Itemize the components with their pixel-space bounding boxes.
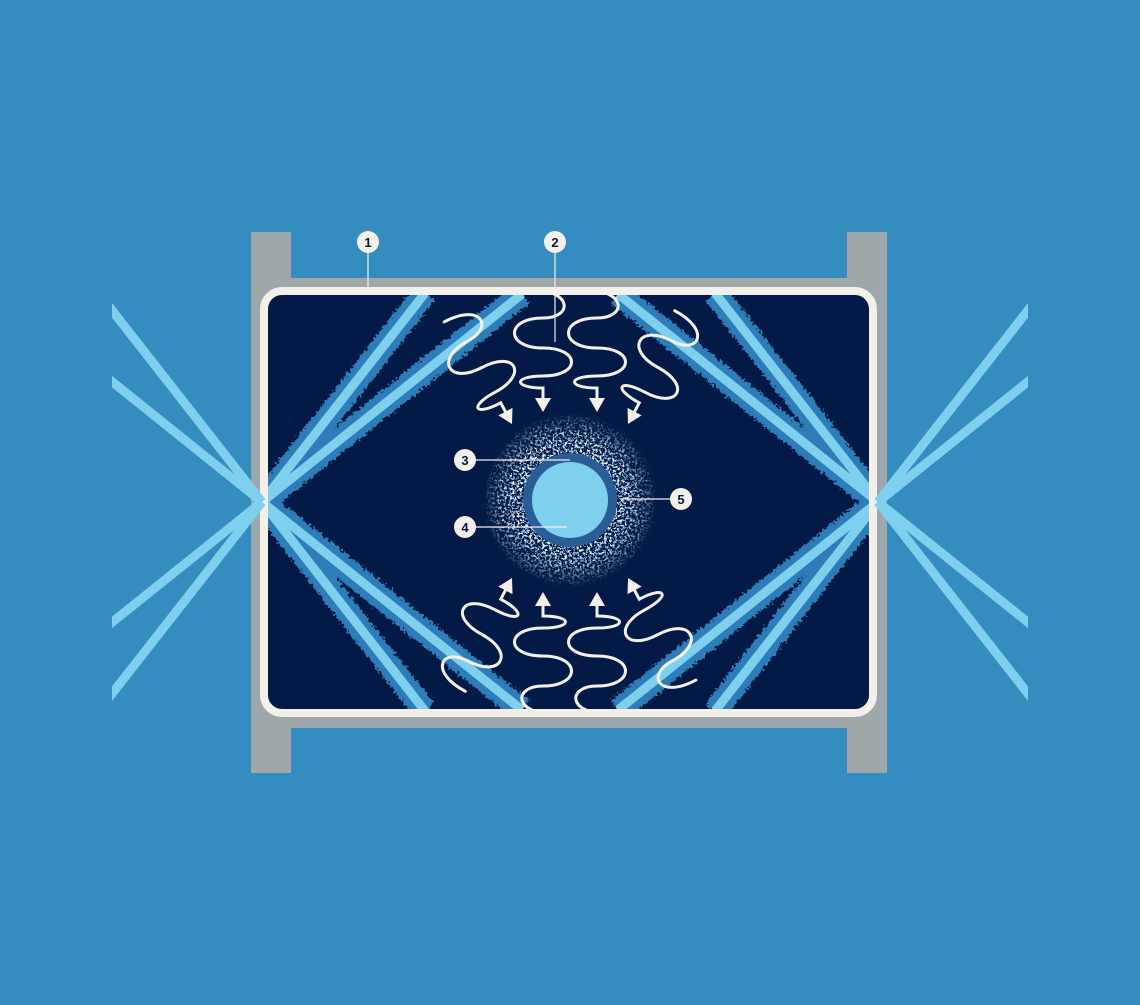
waves: top microwaves pointing down: [442, 295, 700, 424]
atom cloud: speckled halo: [482, 412, 658, 588]
waves: bottom microwaves pointing up: [440, 578, 698, 709]
label 1: 1: [364, 235, 372, 250]
label 4: [454, 516, 567, 538]
sphere: outer ring and inner core: [523, 453, 617, 547]
label 2: [544, 231, 566, 342]
laser beams inside the chamber with glow: [262, 293, 878, 711]
label 3: [454, 449, 570, 471]
frame: gray posts and rails: [251, 232, 887, 773]
laser beams outside the chamber: [100, 295, 1040, 709]
label 5: 5: [677, 492, 685, 507]
label 2: 2: [551, 235, 559, 250]
label 4: 4: [461, 520, 469, 535]
chamber: white rounded rectangle with dark interior: [264, 291, 873, 713]
label 3: 3: [461, 453, 469, 468]
label 1: [357, 231, 379, 288]
label 5: [620, 488, 692, 510]
